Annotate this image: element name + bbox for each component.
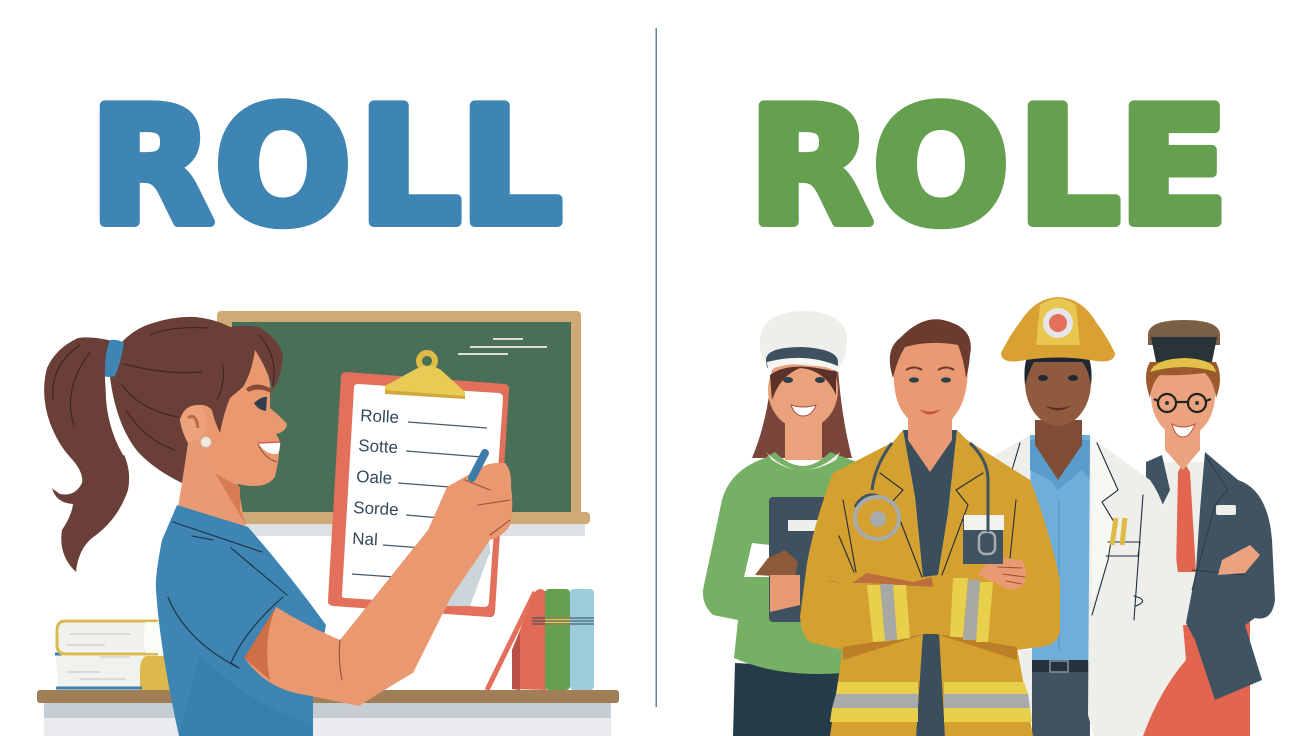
sweater — [703, 452, 865, 674]
head — [1151, 353, 1215, 437]
face — [1038, 375, 1048, 381]
handwritten list: Oale — [356, 467, 393, 488]
hand — [755, 550, 798, 577]
hair strands — [53, 328, 274, 450]
person: woman in green — [703, 311, 865, 736]
folder — [769, 497, 829, 622]
trousers — [1032, 660, 1090, 736]
inner shirt — [903, 430, 957, 577]
teacher head — [53, 317, 287, 530]
head — [768, 351, 838, 429]
teacher shirt — [156, 505, 326, 736]
lab coat — [990, 435, 1186, 736]
panel: four professionals — [703, 297, 1275, 736]
heading: ROLL: ROLL — [90, 73, 562, 260]
neck — [1035, 420, 1082, 480]
face — [783, 377, 793, 383]
lower dark shirt strip — [916, 620, 945, 736]
stethoscope — [855, 443, 988, 539]
panel: teacher scene — [37, 311, 619, 736]
person: man with helmet and lab coat — [990, 297, 1186, 736]
neck — [785, 415, 822, 460]
head — [1025, 338, 1091, 426]
helmet — [1001, 297, 1115, 361]
glasses — [1154, 394, 1211, 412]
face — [195, 348, 287, 486]
head — [894, 338, 968, 432]
desk — [37, 690, 619, 736]
clipboard — [328, 353, 509, 617]
pocket — [963, 480, 1004, 564]
skirt — [733, 663, 840, 736]
ponytail band — [105, 340, 124, 377]
neck — [178, 420, 246, 530]
sleeve bands — [867, 578, 993, 642]
pen — [472, 453, 485, 478]
hat — [1148, 320, 1220, 345]
eye — [254, 397, 267, 411]
trousers — [1143, 620, 1250, 736]
coat — [800, 430, 1060, 736]
handwritten list: Sotte — [358, 436, 398, 457]
clipboard clip — [385, 353, 465, 399]
orange cuff shade — [852, 573, 933, 587]
neck — [908, 400, 952, 472]
center divider — [656, 28, 657, 707]
handwritten list: Sorde — [353, 498, 399, 519]
handwritten list: Rolle — [360, 406, 399, 427]
smile — [258, 442, 280, 454]
handwritten list — [352, 406, 490, 583]
crossed arms — [800, 577, 1060, 650]
teacher arm — [244, 453, 512, 706]
chalkboard — [217, 311, 590, 536]
suit jacket — [1146, 452, 1275, 700]
shirt — [1161, 462, 1205, 625]
person: center doctor in turnout coat — [800, 319, 1060, 736]
hat — [760, 311, 847, 368]
bookstack right — [487, 589, 594, 690]
neck — [1165, 430, 1200, 470]
tie — [1176, 462, 1196, 572]
hair — [752, 370, 852, 458]
hand — [978, 558, 1026, 590]
teacher ponytail — [44, 337, 129, 572]
handwritten list: Nal — [352, 529, 378, 549]
person: suit with top hat — [1143, 320, 1275, 736]
heading: ROLE: ROLE — [749, 73, 1228, 260]
reflective stripes — [830, 682, 1032, 722]
face — [909, 377, 919, 383]
hair — [110, 317, 283, 483]
shirt — [1030, 435, 1090, 662]
ear — [180, 405, 207, 443]
bookstack left — [55, 620, 176, 690]
